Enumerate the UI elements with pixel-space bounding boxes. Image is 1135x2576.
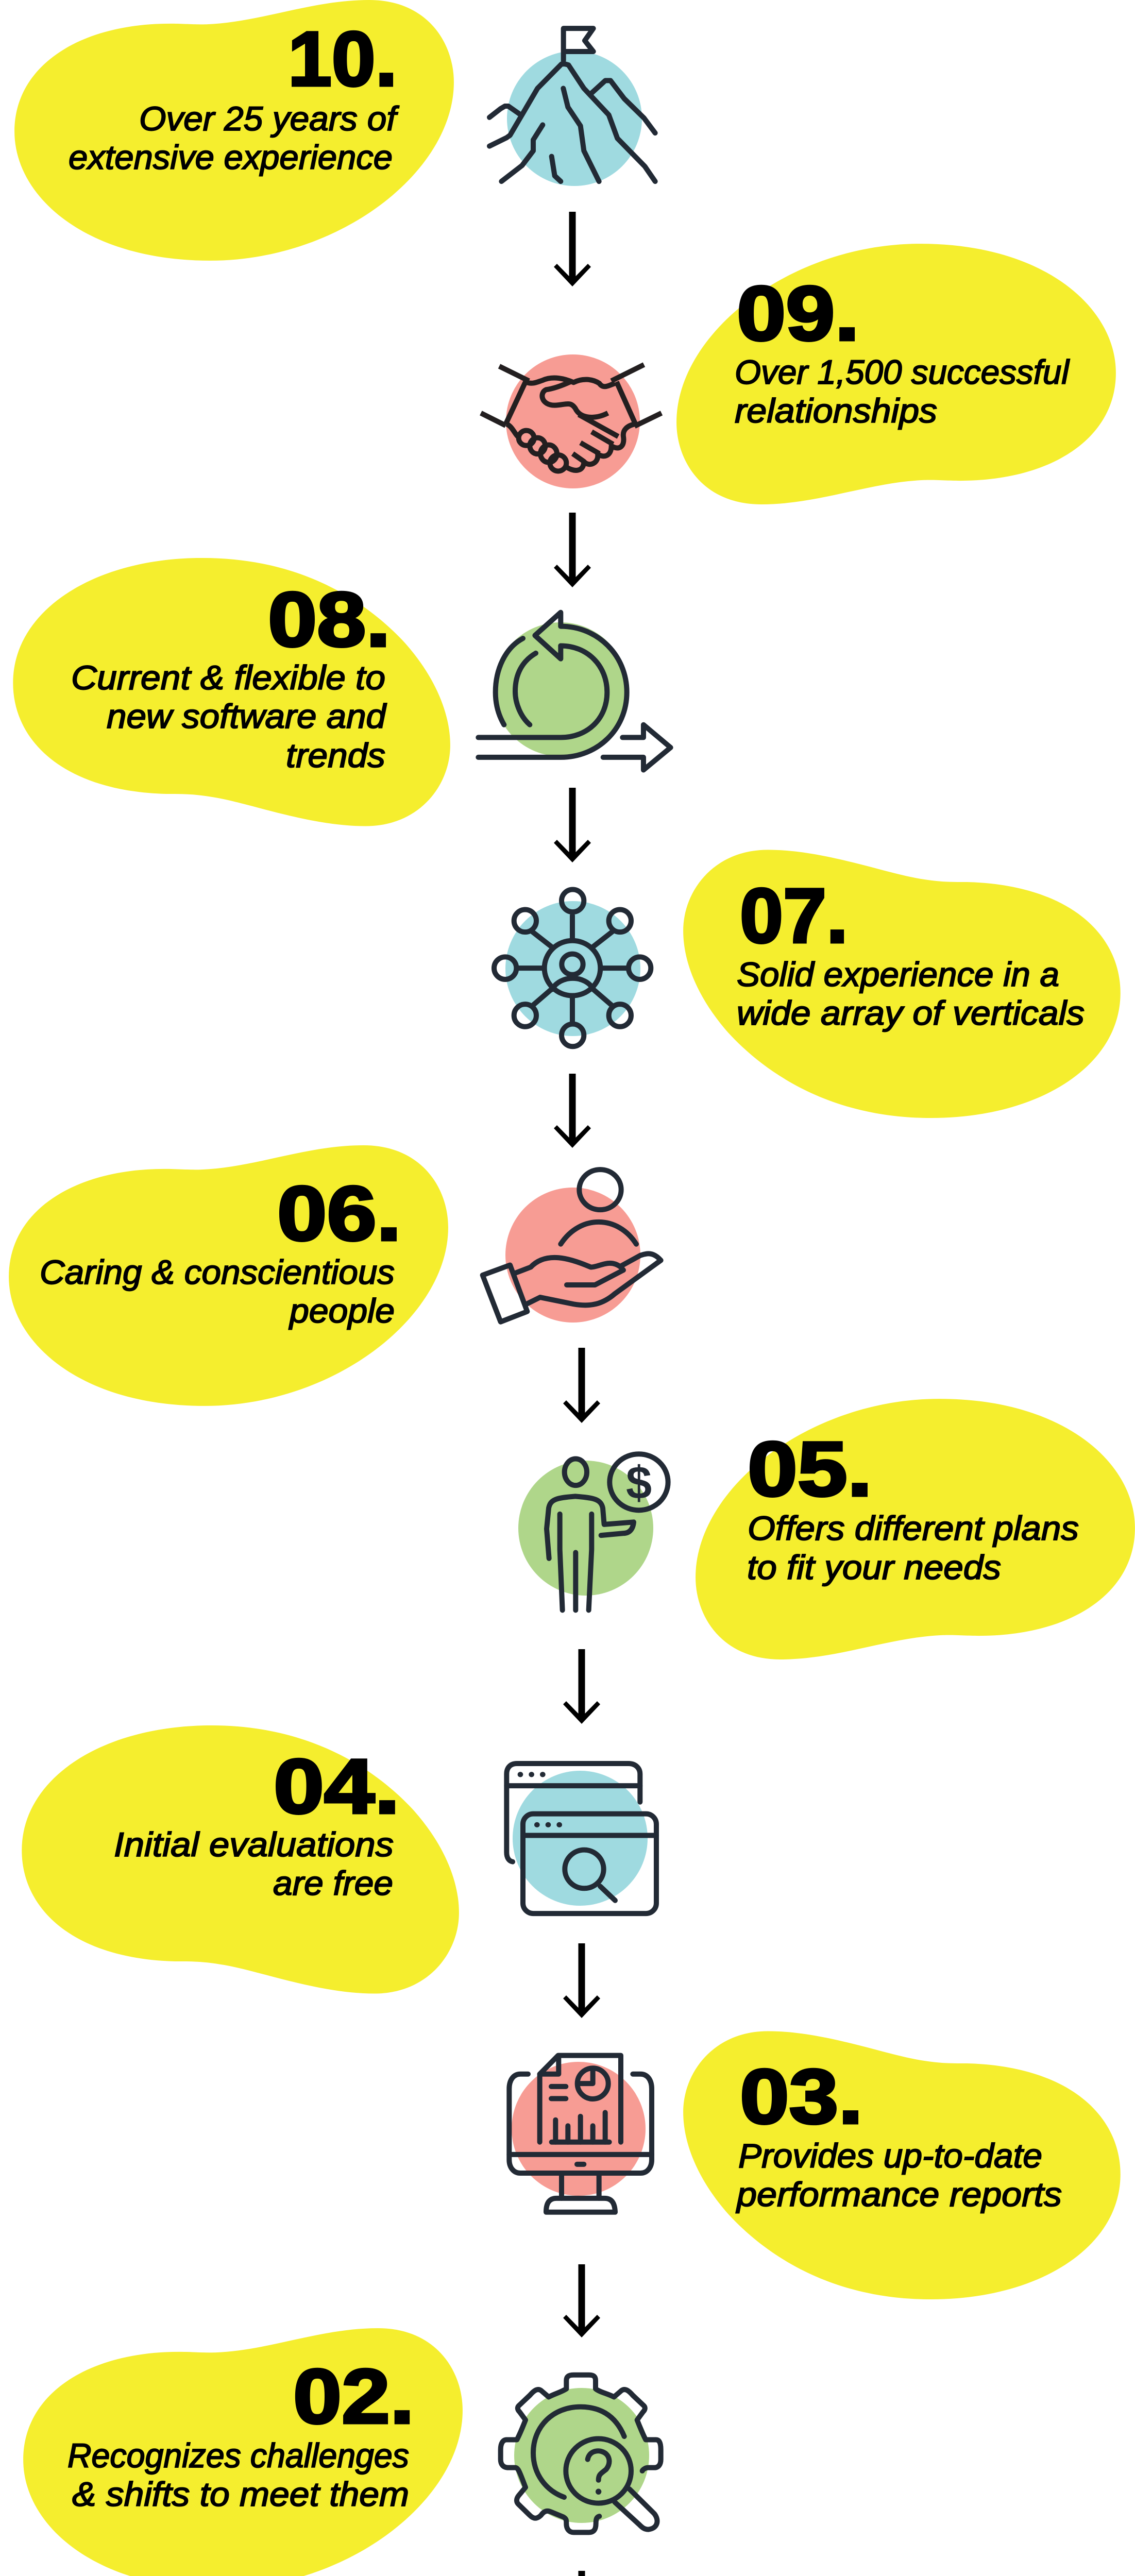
panel: step 04: 04.: [274, 1743, 400, 1829]
icon: person with dollar coin: $: [626, 1458, 652, 1509]
icon: agile loop with arrow: [478, 613, 671, 770]
icon: person with dollar coin: [518, 1454, 668, 1610]
icon: hand holding person: [483, 1170, 661, 1323]
panel: step 03: 03.: [740, 2053, 863, 2140]
arrow: 02 to 01: [563, 2571, 600, 2576]
arrow: 10 to 09: [554, 212, 591, 286]
panel: step 03: [683, 2031, 1121, 2299]
panel: step 09: relationships: [735, 392, 937, 430]
arrow: 08 to 07: [554, 788, 591, 862]
panel: step 05: Offers different plans: [748, 1509, 1079, 1547]
panel: step 03: performance reports: [736, 2175, 1062, 2213]
panel: step 05: to fit your needs: [747, 1548, 1001, 1586]
arrow: 09 to 08: [554, 513, 591, 587]
panel: step 08: new software and: [107, 697, 387, 735]
panel: step 08: Current & flexible to: [71, 658, 385, 697]
panel: step 06: [9, 1145, 448, 1406]
panel: step 04: are free: [273, 1864, 393, 1902]
arrow: 04 to 03: [563, 1943, 600, 2018]
panel: step 02: & shifts to meet them: [72, 2475, 409, 2513]
panel: step 09: Over 1,500 successful: [735, 353, 1070, 391]
icon: browser windows with magnifier: [506, 1764, 656, 1913]
panel: step 06: people: [289, 1292, 395, 1330]
arrow: 05 to 04: [563, 1649, 600, 1724]
arrow: 03 to 02: [563, 2264, 600, 2337]
panel: step 03: Provides up-to-date: [738, 2137, 1042, 2175]
panel: step 10: [14, 0, 454, 261]
panel: step 06: Caring & conscientious: [40, 1253, 395, 1291]
arrow: 07 to 06: [554, 1074, 591, 1148]
panel: step 07: [683, 850, 1121, 1118]
panel: step 05: 05.: [748, 1426, 872, 1512]
icon: gear with question magnifier: [501, 2375, 661, 2532]
arrow: 06 to 05: [563, 1348, 600, 1423]
icon: monitor with report: [509, 2056, 652, 2212]
panel: step 10: Over 25 years of: [139, 99, 400, 138]
panel: step 08: [13, 558, 450, 826]
icon: network of people: [494, 889, 651, 1046]
icon: handshake: [481, 354, 662, 488]
icon: mountain with flag: [489, 28, 655, 186]
panel: step 08: 08.: [268, 576, 391, 663]
panel: step 02: 02.: [293, 2353, 414, 2439]
panel: step 07: Solid experience in a: [737, 955, 1059, 993]
panel: step 04: Initial evaluations: [114, 1825, 394, 1863]
panel: step 07: 07.: [740, 872, 848, 959]
panel: step 04: [22, 1725, 459, 1994]
panel: step 09: 09.: [737, 270, 859, 357]
panel: step 02: Recognizes challenges: [67, 2436, 409, 2475]
panel: step 07: wide array of verticals: [737, 994, 1085, 1032]
panel: step 10: extensive experience: [69, 138, 393, 176]
panel: step 09: [676, 244, 1116, 504]
panel: step 08: trends: [286, 736, 385, 774]
panel: step 06: 06.: [277, 1170, 401, 1257]
panel: step 02: [23, 2328, 463, 2576]
panel: step 10: 10.: [288, 15, 397, 102]
panel: step 05: [696, 1399, 1135, 1659]
